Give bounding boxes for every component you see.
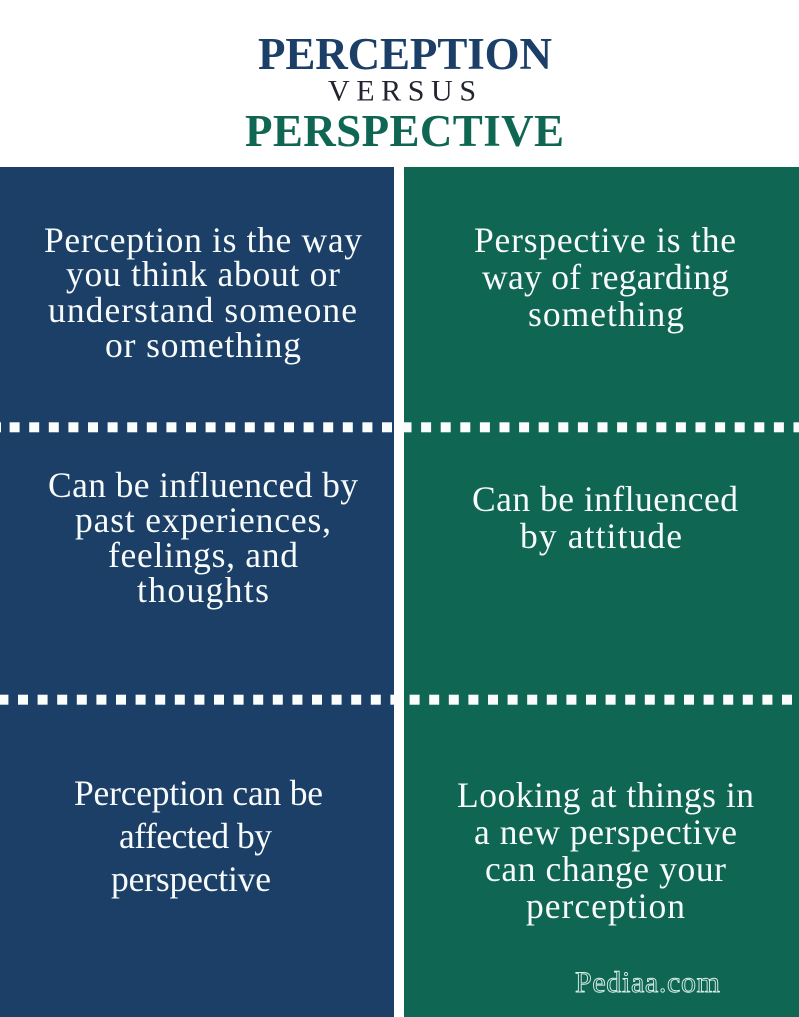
text: perspective relation: Looking at things in bbox=[457, 775, 754, 815]
text: perception influences: thoughts bbox=[137, 570, 269, 610]
text: perception relation: Perception can be bbox=[74, 773, 323, 813]
logo: Pediaa.com: Pediaa.com bbox=[575, 966, 720, 999]
text: perspective influences bbox=[472, 479, 738, 556]
text: perception relation: affected by bbox=[119, 816, 272, 856]
title: VERSUS bbox=[328, 74, 476, 108]
text: perspective relation bbox=[457, 775, 754, 926]
panel: perception column bbox=[0, 167, 394, 1017]
text: perception influences: Can be influenced by bbox=[48, 465, 358, 505]
title bbox=[245, 29, 564, 156]
title: PERSPECTIVE bbox=[245, 106, 564, 156]
text: perspective definition: something bbox=[528, 294, 684, 334]
text: perception definition: Perception is the way bbox=[44, 220, 362, 260]
dotted divider: row 2 bbox=[0, 695, 792, 705]
text: perspective relation: can change your bbox=[485, 849, 726, 889]
text: perception definition: you think about or bbox=[66, 254, 340, 294]
text: perception definition: understand someone bbox=[48, 290, 357, 330]
text: perception relation: perspective bbox=[111, 859, 271, 899]
text: perspective definition: Perspective is the bbox=[474, 220, 736, 260]
text: perception definition bbox=[44, 220, 362, 365]
text: perspective definition: way of regarding bbox=[482, 257, 729, 297]
text: perception influences: feelings, and bbox=[108, 535, 298, 575]
text: perspective relation: a new perspective bbox=[474, 812, 737, 852]
panel: perspective column bbox=[404, 167, 799, 1017]
text: perception relation bbox=[74, 773, 323, 899]
dotted divider: row 1 bbox=[0, 422, 799, 432]
text: perspective influences: Can be influenced bbox=[472, 479, 738, 519]
text: perspective definition bbox=[474, 220, 736, 334]
title: PERCEPTION bbox=[258, 29, 552, 79]
text: perspective relation: perception bbox=[526, 886, 685, 926]
text: perception influences: past experiences, bbox=[75, 500, 331, 540]
text: perception definition: or something bbox=[105, 325, 301, 365]
text: perspective influences: by attitude bbox=[520, 516, 682, 556]
text: perception influences bbox=[48, 465, 358, 610]
